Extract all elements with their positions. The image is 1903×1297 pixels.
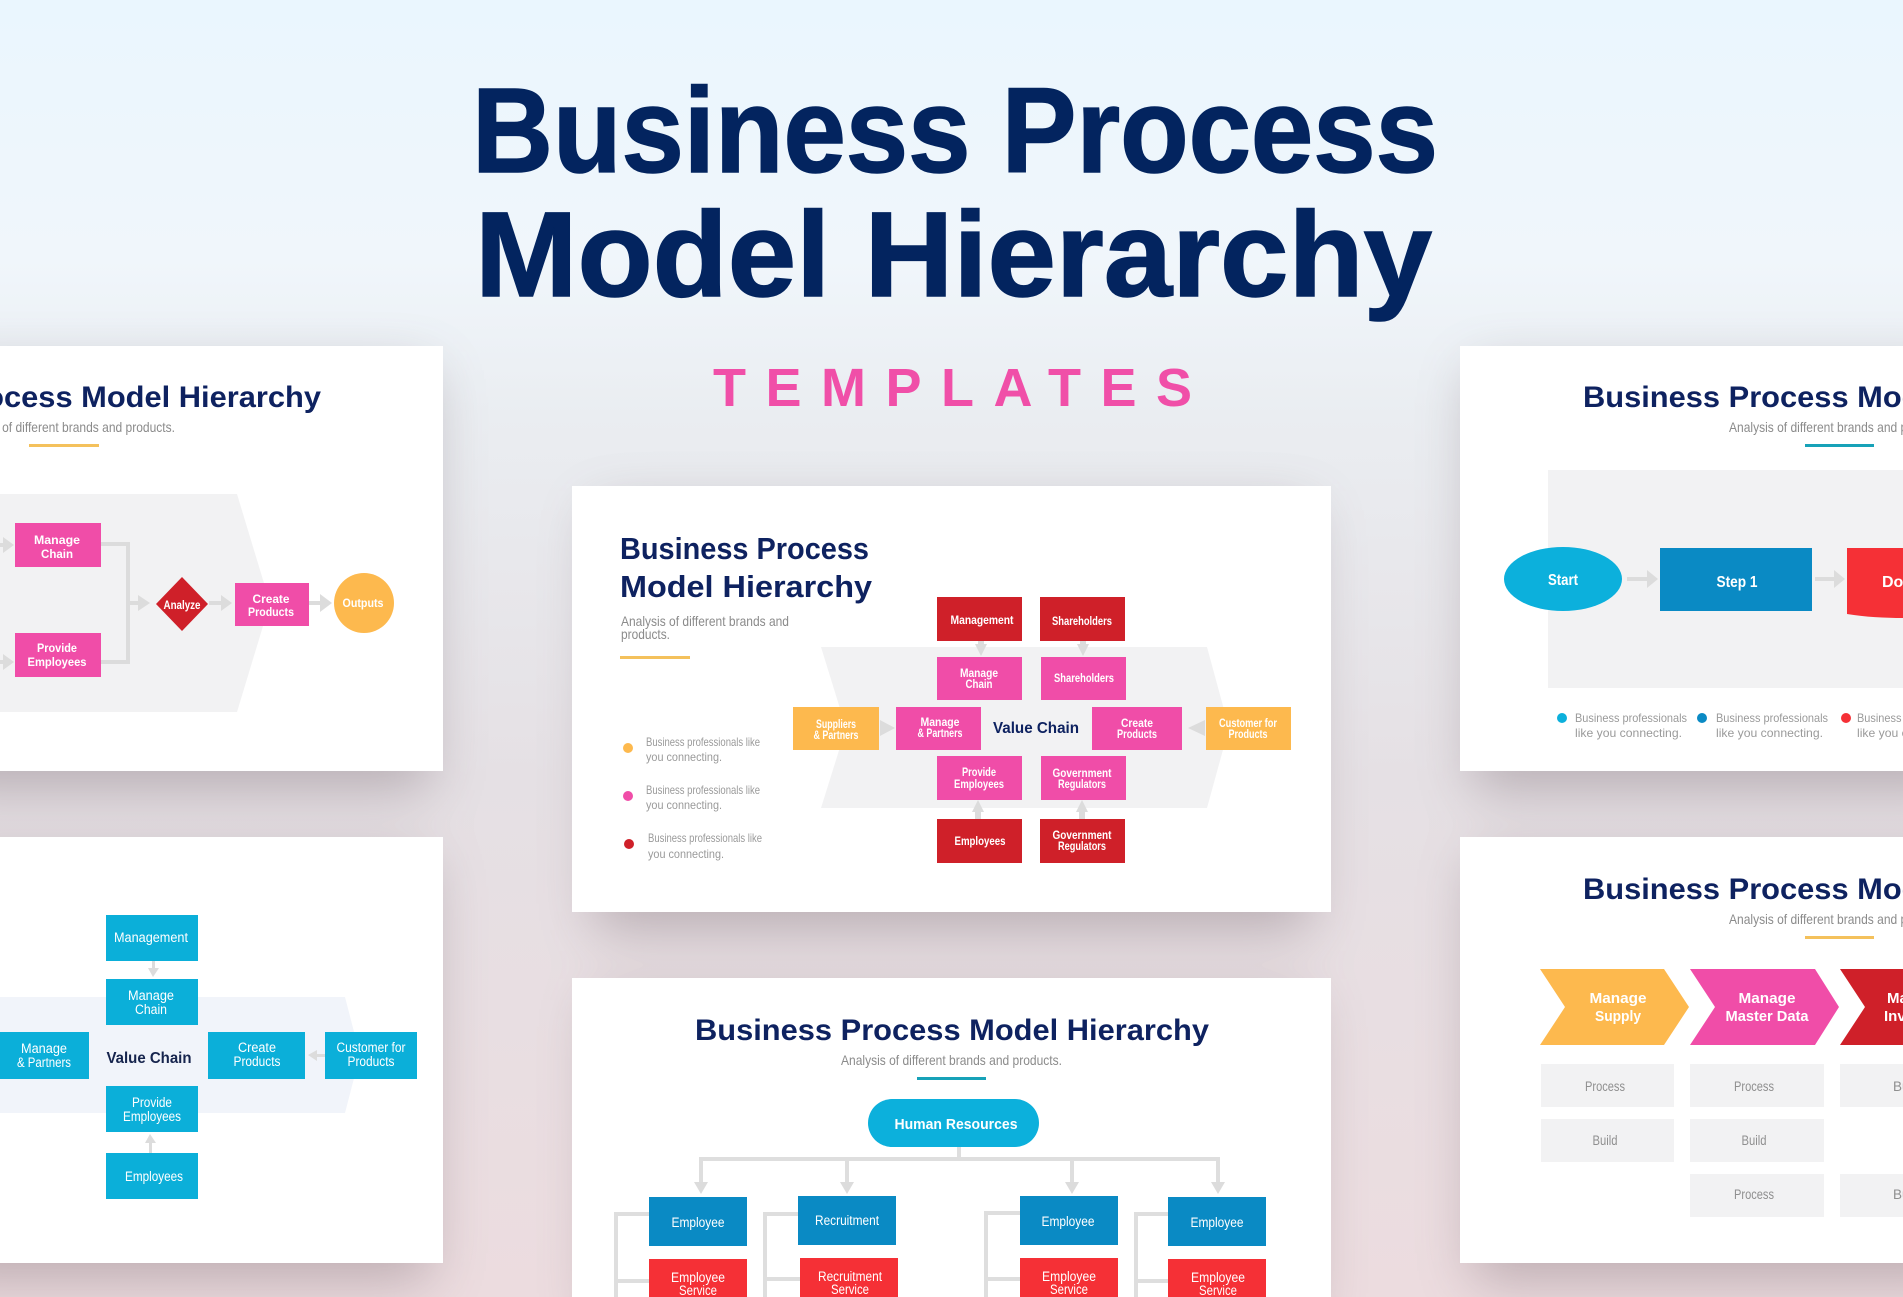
box: government regulators red: Government bbox=[1052, 828, 1112, 842]
main title: Model Hierarchy bbox=[475, 186, 1432, 322]
slide background bbox=[1460, 837, 1903, 1263]
panel: bottom-left slide bbox=[0, 837, 443, 1263]
slide background bbox=[572, 978, 1331, 1297]
cell: build col 1: Build bbox=[1592, 1133, 1618, 1148]
box: create products bbox=[208, 1032, 305, 1079]
legend item: light blue: like you connecting. bbox=[1575, 726, 1682, 740]
box: provide employees: Provide bbox=[962, 765, 996, 779]
diamond: analyze bbox=[156, 577, 208, 631]
box: shareholders bbox=[1040, 597, 1125, 641]
slide title: Model Hierarchy bbox=[620, 569, 873, 604]
box: provide employees: Provide bbox=[132, 1095, 172, 1110]
box: shareholders: Shareholders bbox=[1052, 614, 1112, 628]
box: suppliers and partners: Suppliers bbox=[816, 717, 856, 731]
cell: process col 1 bbox=[1541, 1064, 1674, 1107]
box: employee service 3: Employee bbox=[1191, 1270, 1245, 1285]
box: manage chain bbox=[15, 523, 101, 567]
cell: process col 2: Process bbox=[1734, 1079, 1774, 1094]
box: manage and partners: Manage bbox=[920, 715, 960, 729]
box: employee 2 bbox=[1020, 1196, 1118, 1245]
slide background bbox=[0, 346, 443, 771]
box: create products: Create bbox=[1121, 716, 1153, 730]
box: employee 1 bbox=[649, 1197, 747, 1246]
box: create products: Products bbox=[1117, 727, 1157, 741]
arrow: step to document bbox=[1815, 570, 1845, 588]
box: management bbox=[106, 915, 198, 961]
legend item: red: Business professionals like bbox=[648, 831, 762, 845]
chevron: manage master data: Manage bbox=[1738, 990, 1796, 1007]
slide description: Analysis of different brands and bbox=[621, 613, 789, 629]
slide title: Business Process bbox=[620, 531, 869, 566]
box: management bbox=[937, 597, 1022, 641]
box: employee 2: Employee bbox=[1042, 1214, 1094, 1229]
label: value chain: Value Chain bbox=[106, 1050, 192, 1067]
box: employee service 2 bbox=[1020, 1258, 1118, 1297]
legend item: blue: like you connecting. bbox=[1716, 726, 1823, 740]
box: employees: Employees bbox=[954, 834, 1006, 848]
box: create products: Products bbox=[248, 605, 294, 619]
box: provide employees: Employees bbox=[123, 1109, 181, 1124]
legend item: red bbox=[624, 831, 762, 861]
grey process backdrop bbox=[1548, 470, 1903, 688]
diamond: analyze: Analyze bbox=[164, 600, 200, 612]
panel: top-right slide bbox=[1460, 346, 1903, 771]
card shadows bbox=[0, 370, 1903, 1297]
legend item: blue bbox=[1697, 711, 1828, 740]
chevron: manage supply bbox=[1540, 969, 1689, 1045]
accent line bbox=[620, 656, 690, 659]
box: provide employees bbox=[937, 756, 1022, 800]
main title bbox=[472, 62, 1438, 322]
cell: process col 1: Process bbox=[1585, 1079, 1625, 1094]
chevron: manage supply: Manage bbox=[1590, 990, 1646, 1007]
box: management: Management bbox=[950, 613, 1014, 627]
box: government regulators pink: Regulators bbox=[1058, 777, 1106, 791]
circle: outputs bbox=[334, 573, 394, 633]
box: employee service 1: Employee bbox=[671, 1270, 725, 1285]
box: government regulators pink: Government bbox=[1052, 766, 1112, 780]
box: manage chain: Manage bbox=[34, 533, 80, 547]
slide title: Business Process Model Hierarchy bbox=[695, 1014, 1209, 1047]
legend item: pink: Business professionals like bbox=[646, 783, 760, 797]
slide title bbox=[620, 531, 873, 604]
box: customer for products: Products bbox=[1228, 727, 1268, 741]
cell: build col 2 bbox=[1690, 1119, 1824, 1162]
box: shareholders pink bbox=[1041, 657, 1126, 700]
circle: outputs: Outputs bbox=[342, 596, 384, 610]
box: manage and partners: Manage bbox=[21, 1041, 67, 1056]
box: create products: Create bbox=[238, 1040, 276, 1055]
chevron: manage master data: Master Data bbox=[1726, 1008, 1809, 1025]
box: manage chain: Chain bbox=[135, 1002, 167, 1017]
box: shareholders pink: Shareholders bbox=[1054, 671, 1114, 685]
slide background bbox=[0, 837, 443, 1263]
box: create products bbox=[235, 583, 309, 626]
legend item: orange: you connecting. bbox=[646, 750, 722, 764]
box: suppliers and partners bbox=[793, 707, 879, 750]
accent line bbox=[29, 444, 99, 447]
box: employee service 1 bbox=[649, 1259, 747, 1297]
box: provide employees: Employees bbox=[954, 777, 1004, 791]
value chain chevron backdrop bbox=[821, 647, 1229, 808]
box: recruitment service: Service bbox=[831, 1282, 869, 1297]
box: recruitment: Recruitment bbox=[815, 1213, 879, 1228]
box: create products: Create bbox=[252, 592, 290, 606]
box: manage and partners: & Partners bbox=[17, 1055, 71, 1070]
box: manage and partners bbox=[896, 707, 981, 750]
arrows bbox=[145, 961, 325, 1153]
box: provide employees: Employees bbox=[28, 655, 87, 669]
chevron: manage supply: Supply bbox=[1595, 1008, 1642, 1025]
cell: build col 2: Build bbox=[1742, 1133, 1766, 1148]
legend item: red bbox=[1841, 711, 1903, 740]
box: provide employees: Provide bbox=[37, 641, 77, 655]
cell: build col 3 row 3 bbox=[1840, 1174, 1903, 1217]
chevron: manage inventory bbox=[1840, 969, 1903, 1045]
legend item: blue: Business professionals bbox=[1716, 711, 1828, 725]
accent line bbox=[1805, 444, 1874, 447]
box: employees bbox=[937, 819, 1022, 863]
box: government regulators red: Regulators bbox=[1058, 839, 1106, 853]
cell: process col 2 bbox=[1690, 1064, 1824, 1107]
box: provide employees bbox=[15, 633, 101, 677]
connectors bbox=[616, 1147, 1225, 1297]
box: government regulators pink bbox=[1041, 756, 1126, 800]
panel: bottom-right slide bbox=[1460, 837, 1903, 1263]
slide description: Analysis of different brands and products. bbox=[841, 1052, 1062, 1068]
box: customer for products: Products bbox=[348, 1054, 395, 1069]
box: manage chain: Manage bbox=[960, 666, 998, 680]
box: recruitment bbox=[798, 1196, 896, 1245]
legend item: orange bbox=[623, 735, 760, 764]
slide background bbox=[1460, 346, 1903, 771]
box: manage and partners bbox=[0, 1032, 89, 1079]
box: recruitment service: Recruitment bbox=[818, 1269, 882, 1284]
box: create products: Products bbox=[234, 1054, 281, 1069]
box: management: Management bbox=[114, 930, 188, 945]
legend item: red: you connecting. bbox=[648, 847, 724, 861]
pill: human resources bbox=[868, 1099, 1039, 1147]
box: manage chain: Chain bbox=[41, 547, 73, 561]
cell: build col 3 row 1 bbox=[1840, 1064, 1903, 1107]
connectors bbox=[0, 537, 332, 670]
box: recruitment service bbox=[800, 1258, 898, 1297]
legend item: orange: Business professionals like bbox=[646, 735, 760, 749]
box: step 1: Step 1 bbox=[1716, 574, 1758, 591]
legend item: pink bbox=[623, 783, 760, 812]
box: manage chain bbox=[937, 657, 1022, 700]
legend item: light blue bbox=[1557, 711, 1687, 740]
label: value chain: Value Chain bbox=[993, 720, 1079, 737]
panel: bottom-center slide bbox=[572, 978, 1331, 1297]
box: manage chain: Chain bbox=[966, 677, 992, 691]
box: employee 3 bbox=[1168, 1197, 1266, 1246]
box: customer for products: Customer for bbox=[1219, 716, 1277, 730]
grey arrow backdrop bbox=[0, 494, 270, 712]
box: manage chain bbox=[106, 979, 198, 1025]
box: provide employees bbox=[106, 1086, 198, 1132]
box: customer for products bbox=[325, 1032, 417, 1079]
box: customer for products: Customer for bbox=[336, 1040, 406, 1055]
ellipse: start: Start bbox=[1548, 572, 1579, 589]
accent line bbox=[917, 1077, 986, 1080]
box: manage chain: Manage bbox=[128, 988, 174, 1003]
box: employee service 2: Service bbox=[1050, 1282, 1088, 1297]
legend item: light blue: Business professionals bbox=[1575, 711, 1687, 725]
value chain backdrop bbox=[0, 997, 360, 1113]
box: customer for products bbox=[1206, 707, 1291, 750]
accent line bbox=[1805, 936, 1874, 939]
legend item: pink: you connecting. bbox=[646, 798, 722, 812]
document shape bbox=[1847, 548, 1903, 618]
box: suppliers and partners: & Partners bbox=[814, 728, 859, 742]
chevron: manage master data bbox=[1690, 969, 1839, 1045]
cell: build col 1 bbox=[1541, 1119, 1674, 1162]
box: step 1 bbox=[1660, 548, 1812, 611]
subtitle: templates: TEMPLATES bbox=[713, 358, 1192, 418]
box: create products bbox=[1092, 707, 1182, 750]
box: government regulators red bbox=[1040, 819, 1125, 863]
arrow: start to step bbox=[1627, 570, 1658, 588]
box: employee 3: Employee bbox=[1190, 1215, 1244, 1230]
box: employee 1: Employee bbox=[672, 1215, 724, 1230]
box: employees: Employees bbox=[125, 1169, 183, 1184]
arrows bbox=[880, 641, 1205, 819]
cell: process col 2 row 3 bbox=[1690, 1174, 1824, 1217]
slide description: products. bbox=[621, 626, 670, 642]
box: employee service 2: Employee bbox=[1042, 1269, 1096, 1284]
box: manage and partners: & Partners bbox=[918, 726, 963, 740]
pill: human resources: Human Resources bbox=[894, 1116, 1018, 1133]
box: employees bbox=[106, 1153, 198, 1199]
panel: top-left slide bbox=[0, 346, 443, 771]
slide background bbox=[572, 486, 1331, 912]
cell: process col 2 row 3: Process bbox=[1734, 1187, 1774, 1202]
ellipse: start bbox=[1504, 547, 1622, 611]
slide description bbox=[621, 613, 789, 642]
panel: center slide bbox=[572, 486, 1331, 912]
box: employee service 3 bbox=[1168, 1259, 1266, 1297]
main title: Business Process bbox=[472, 62, 1438, 198]
